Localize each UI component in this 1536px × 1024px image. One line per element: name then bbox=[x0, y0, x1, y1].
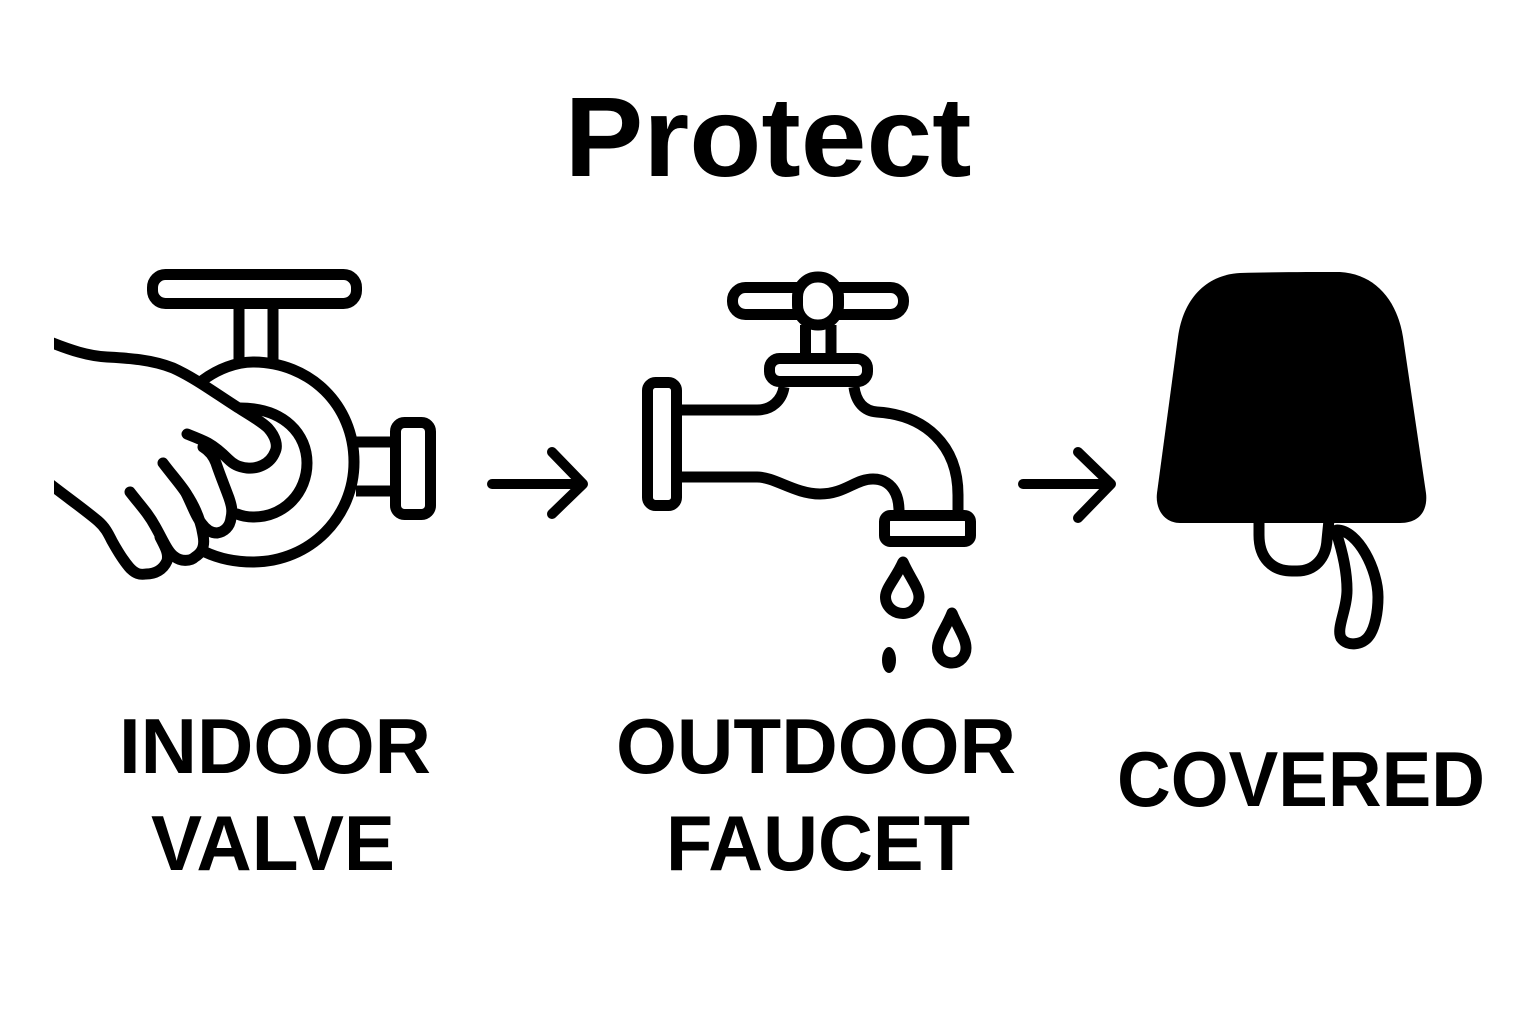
arrow: faucet to covered bbox=[1023, 452, 1111, 518]
arrow: valve to faucet bbox=[492, 452, 583, 514]
icon: indoor valve with hand bbox=[50, 274, 430, 574]
label: outdoor faucet: FAUCET bbox=[666, 799, 970, 887]
label: outdoor faucet: OUTDOOR bbox=[616, 702, 1016, 790]
title: Protect bbox=[564, 74, 972, 200]
icon: outdoor faucet with drips bbox=[648, 277, 970, 663]
icon: covered faucet bbox=[1157, 272, 1426, 644]
label: covered: COVERED bbox=[1117, 735, 1485, 823]
label: indoor valve: VALVE bbox=[151, 799, 395, 887]
icon: small drip bbox=[882, 647, 896, 673]
label: indoor valve: INDOOR bbox=[119, 702, 431, 790]
